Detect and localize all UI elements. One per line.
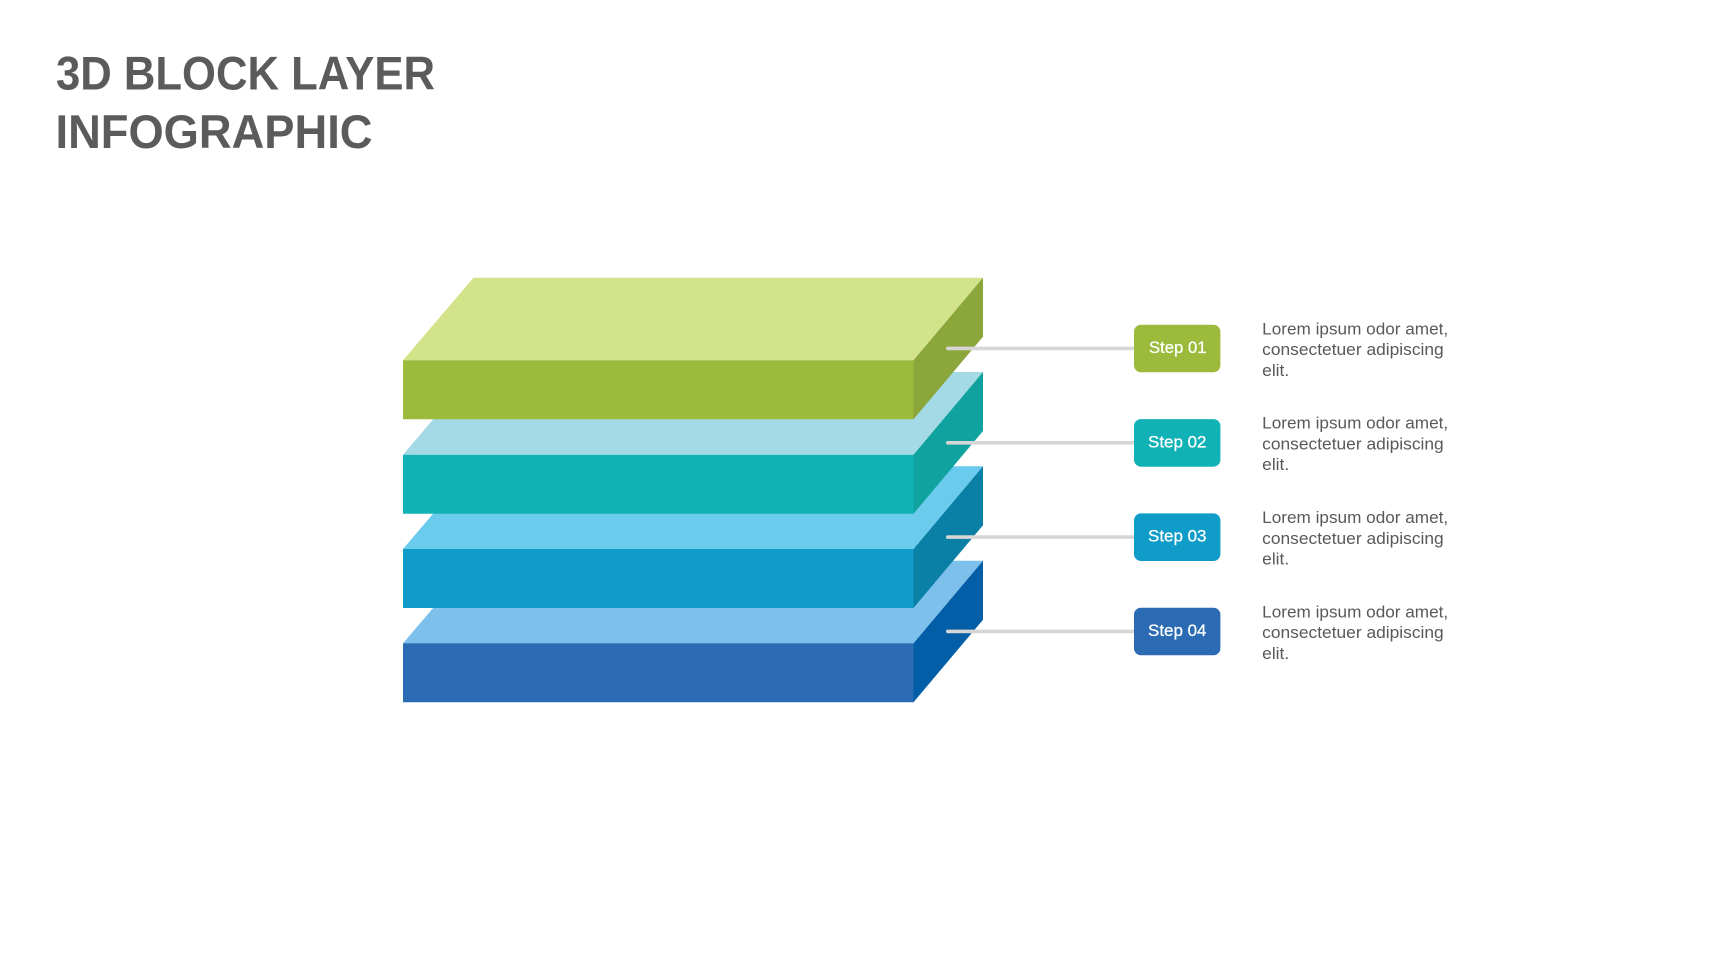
text: step 01 description: elit. (1262, 361, 1289, 380)
layer 1: green block (403, 278, 983, 419)
layer 4: blue block (403, 561, 983, 702)
text: step 01 description: Lorem ipsum odor amet, (1262, 319, 1448, 338)
text: step 03 description: elit. (1262, 550, 1289, 568)
text: step 04 description: Lorem ipsum odor amet, (1262, 602, 1448, 621)
text: step 04 description: consectetuer adipiscing (1262, 623, 1444, 642)
layer 3: sky blue block (403, 466, 983, 608)
layer 2: teal block (403, 372, 983, 514)
connector: step 02 (946, 441, 1136, 445)
text: step 02 description: Lorem ipsum odor amet, (1262, 414, 1448, 433)
badge: step 03 (1134, 513, 1220, 561)
badge: step 02 (1134, 419, 1220, 467)
block stack (403, 278, 983, 702)
text: step 04 description: elit. (1262, 644, 1289, 663)
text: step 03 description (1262, 508, 1448, 568)
title: INFOGRAPHIC (56, 106, 372, 159)
text: step 01 description: consectetuer adipiscing (1262, 340, 1444, 359)
badge: step 03: Step 03 (1148, 528, 1206, 546)
badge: step 01 (1134, 325, 1220, 372)
text: step 04 description (1262, 602, 1448, 663)
badge: step 01: Step 01 (1149, 339, 1206, 357)
text: step 03 description: Lorem ipsum odor amet, (1262, 508, 1448, 527)
text: step 02 description: consectetuer adipiscing (1262, 434, 1444, 453)
title: 3D BLOCK LAYER (56, 48, 435, 100)
connector: step 01 (946, 347, 1136, 350)
badge: step 04 (1134, 608, 1220, 655)
text: step 02 description: elit. (1262, 455, 1289, 474)
connector: step 03 (946, 535, 1136, 539)
text: step 01 description (1262, 319, 1448, 380)
connector: step 04 (946, 630, 1136, 633)
title (56, 48, 435, 159)
text: step 02 description (1262, 414, 1448, 474)
badge: step 04: Step 04 (1148, 622, 1206, 640)
text: step 03 description: consectetuer adipiscing (1262, 529, 1444, 548)
badge: step 02: Step 02 (1148, 433, 1206, 451)
